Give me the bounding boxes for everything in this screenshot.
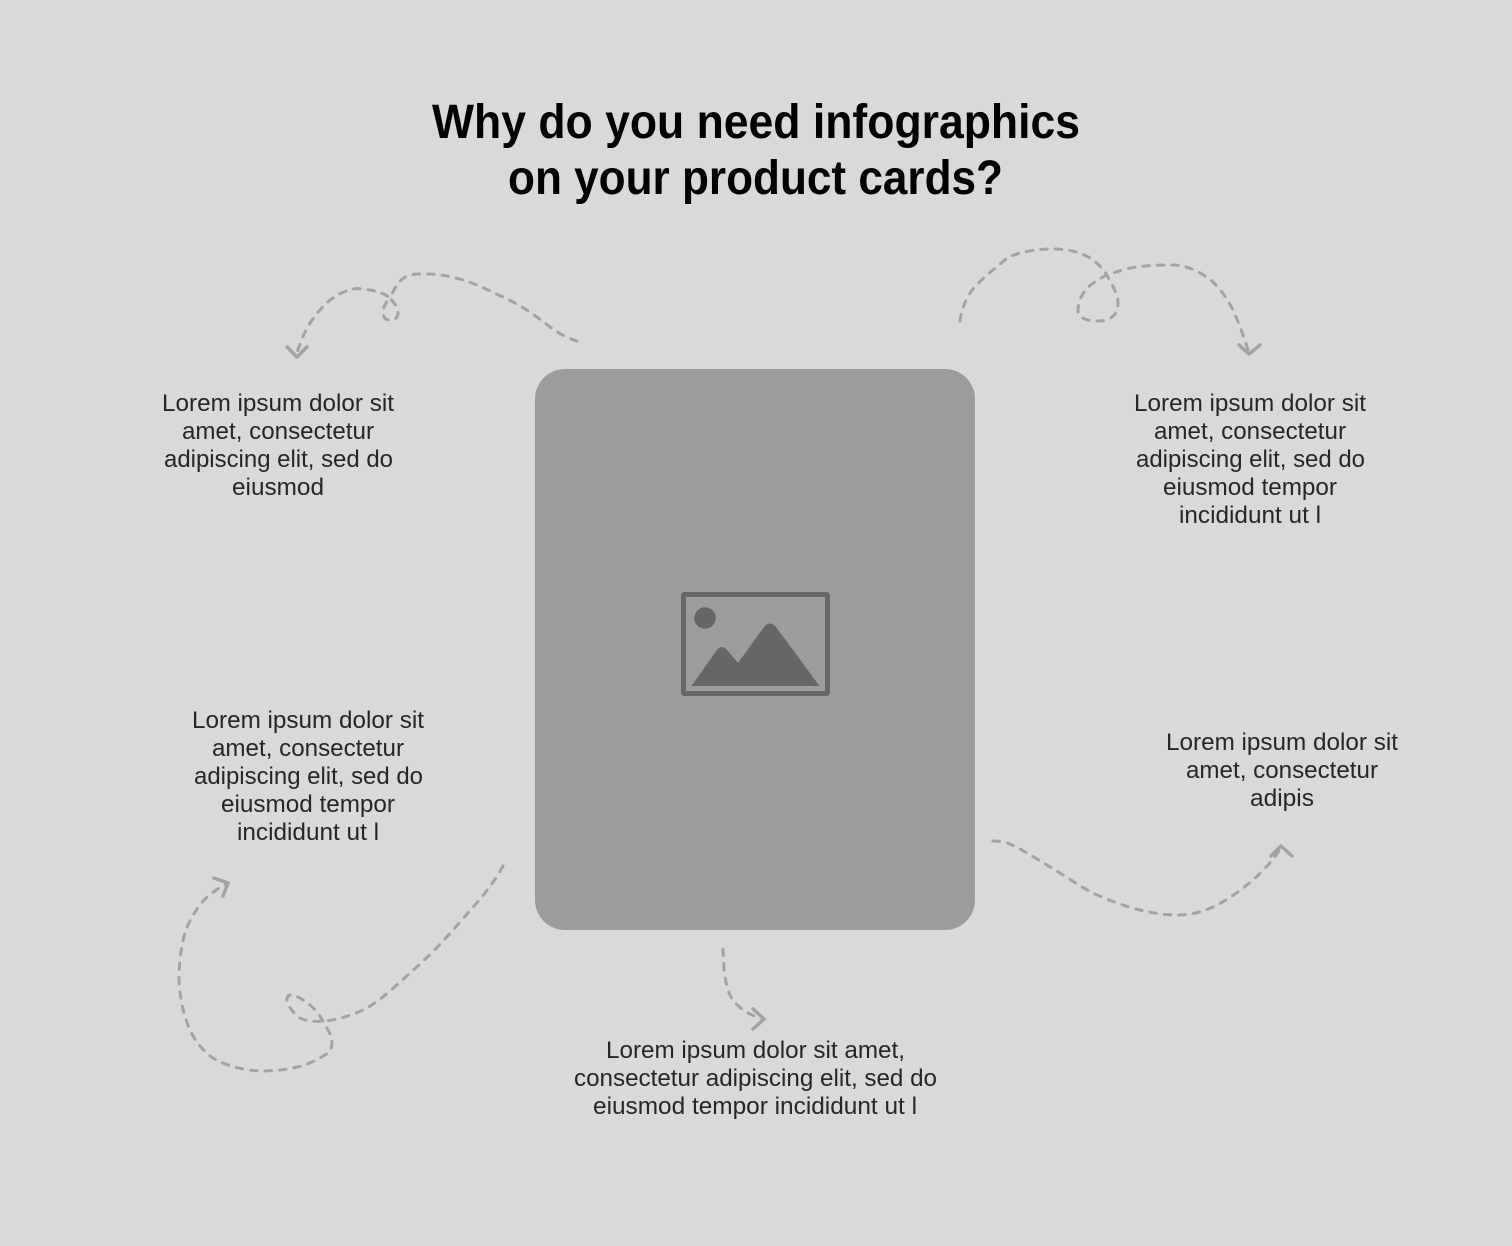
- text block: top right: [1134, 390, 1366, 529]
- text block: middle left: amet, consectetur: [212, 735, 404, 762]
- text block: top left: adipiscing elit, sed do: [164, 446, 393, 473]
- text block: top right: amet, consectetur: [1154, 418, 1346, 445]
- arrow: bottom left: [179, 866, 503, 1071]
- text block: bottom center: [574, 1037, 937, 1120]
- text block: middle left: incididunt ut l: [237, 819, 379, 846]
- text block: top left: eiusmod: [232, 474, 324, 501]
- arrow: bottom right: [993, 841, 1292, 915]
- text block: middle right: amet, consectetur: [1186, 757, 1378, 784]
- text block: middle left: eiusmod tempor: [221, 791, 395, 818]
- text block: bottom center: eiusmod tempor incididunt ut l: [593, 1093, 917, 1120]
- text block: top left: [162, 390, 394, 501]
- text block: bottom center: consectetur adipiscing elit, sed do: [574, 1065, 937, 1092]
- text block: middle left: [192, 707, 424, 846]
- text block: middle left: adipiscing elit, sed do: [194, 763, 423, 790]
- text block: top right: incididunt ut l: [1179, 502, 1321, 529]
- text block: middle right: Lorem ipsum dolor sit: [1166, 729, 1398, 756]
- arrow: top right: [960, 249, 1260, 354]
- text block: top right: eiusmod tempor: [1163, 474, 1337, 501]
- arrow: bottom center: [723, 949, 764, 1029]
- text block: top right: Lorem ipsum dolor sit: [1134, 390, 1366, 417]
- text block: top left: Lorem ipsum dolor sit: [162, 390, 394, 417]
- text block: bottom center: Lorem ipsum dolor sit amet,: [606, 1037, 905, 1064]
- title: on your product cards?: [508, 152, 1003, 205]
- title: Why do you need infographics: [432, 96, 1080, 149]
- title: [432, 96, 1080, 205]
- text block: top left: amet, consectetur: [182, 418, 374, 445]
- arrow: top left: [287, 274, 577, 357]
- text block: top right: adipiscing elit, sed do: [1136, 446, 1365, 473]
- icon: picture placeholder: [684, 594, 828, 694]
- text block: middle left: Lorem ipsum dolor sit: [192, 707, 424, 734]
- panel: product card image placeholder: [535, 369, 975, 930]
- text block: middle right: [1166, 729, 1398, 812]
- text block: middle right: adipis: [1250, 785, 1314, 812]
